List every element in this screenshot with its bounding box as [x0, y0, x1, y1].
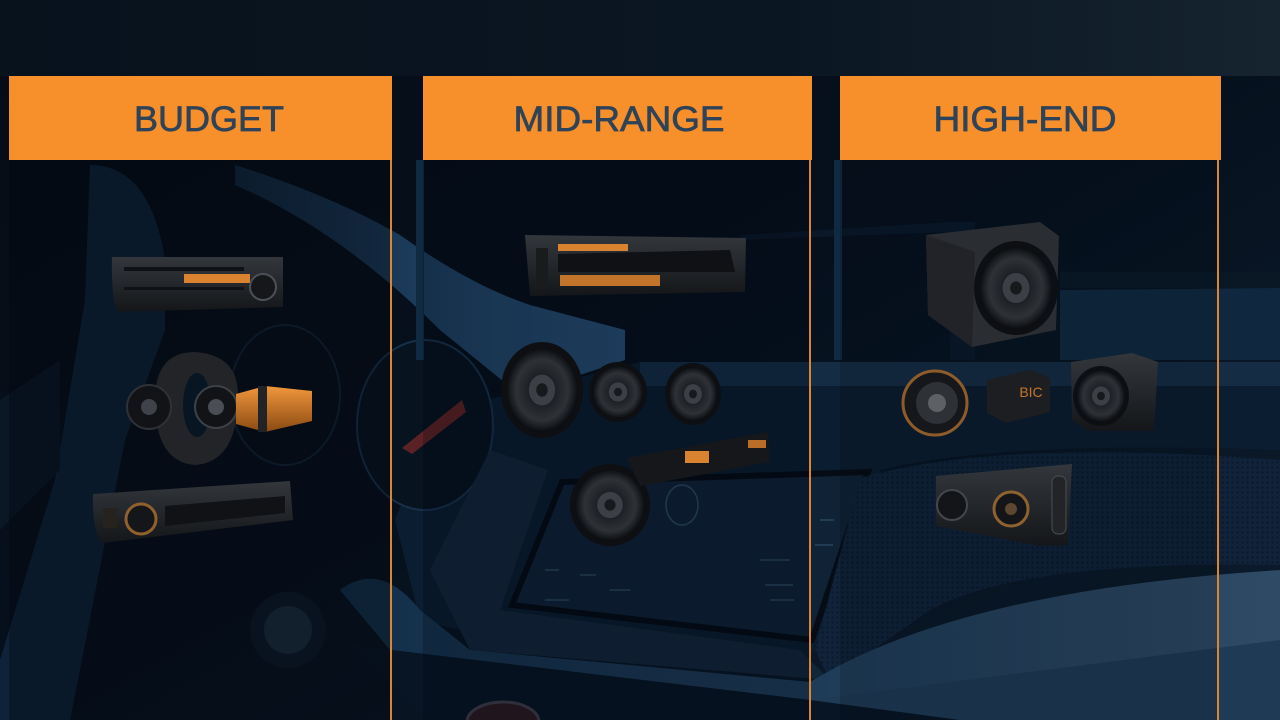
high-end panel shade [840, 160, 1218, 720]
icon: high-end processor [936, 464, 1072, 546]
icon: budget head unit [112, 257, 283, 312]
high-end heading banner: HIGH-END [934, 100, 1116, 139]
panel: mid-range [423, 76, 812, 720]
icon: mid-range amplifier [627, 432, 770, 486]
mid-range panel outline [809, 160, 811, 720]
high-end panel outline [1217, 160, 1219, 720]
mid-range heading banner [423, 76, 812, 160]
budget heading banner: BUDGET [134, 100, 284, 139]
panel: budget [9, 76, 392, 720]
panel: high-end [840, 76, 1221, 720]
icon: high-end amplifier cube: BIC [1019, 384, 1043, 400]
icon: high-end tweeter [903, 371, 967, 435]
budget panel shade [9, 160, 391, 720]
high-end heading banner [840, 76, 1221, 160]
decorative screen glyphs [545, 485, 834, 600]
mid-range heading banner: MID-RANGE [514, 100, 724, 139]
icon: mid-range head unit [525, 235, 746, 296]
icon: mid-range speakers [501, 342, 721, 546]
mid-range panel shade [423, 160, 810, 720]
icon: budget receiver [93, 481, 293, 543]
budget panel outline [390, 160, 392, 720]
icon: high-end amplifier cube [987, 370, 1050, 423]
icon: high-end speaker cube [1071, 353, 1158, 431]
icon: high-end subwoofer [926, 222, 1059, 347]
budget heading banner [9, 76, 392, 160]
icon: budget speaker pair and amplifier [127, 352, 312, 465]
